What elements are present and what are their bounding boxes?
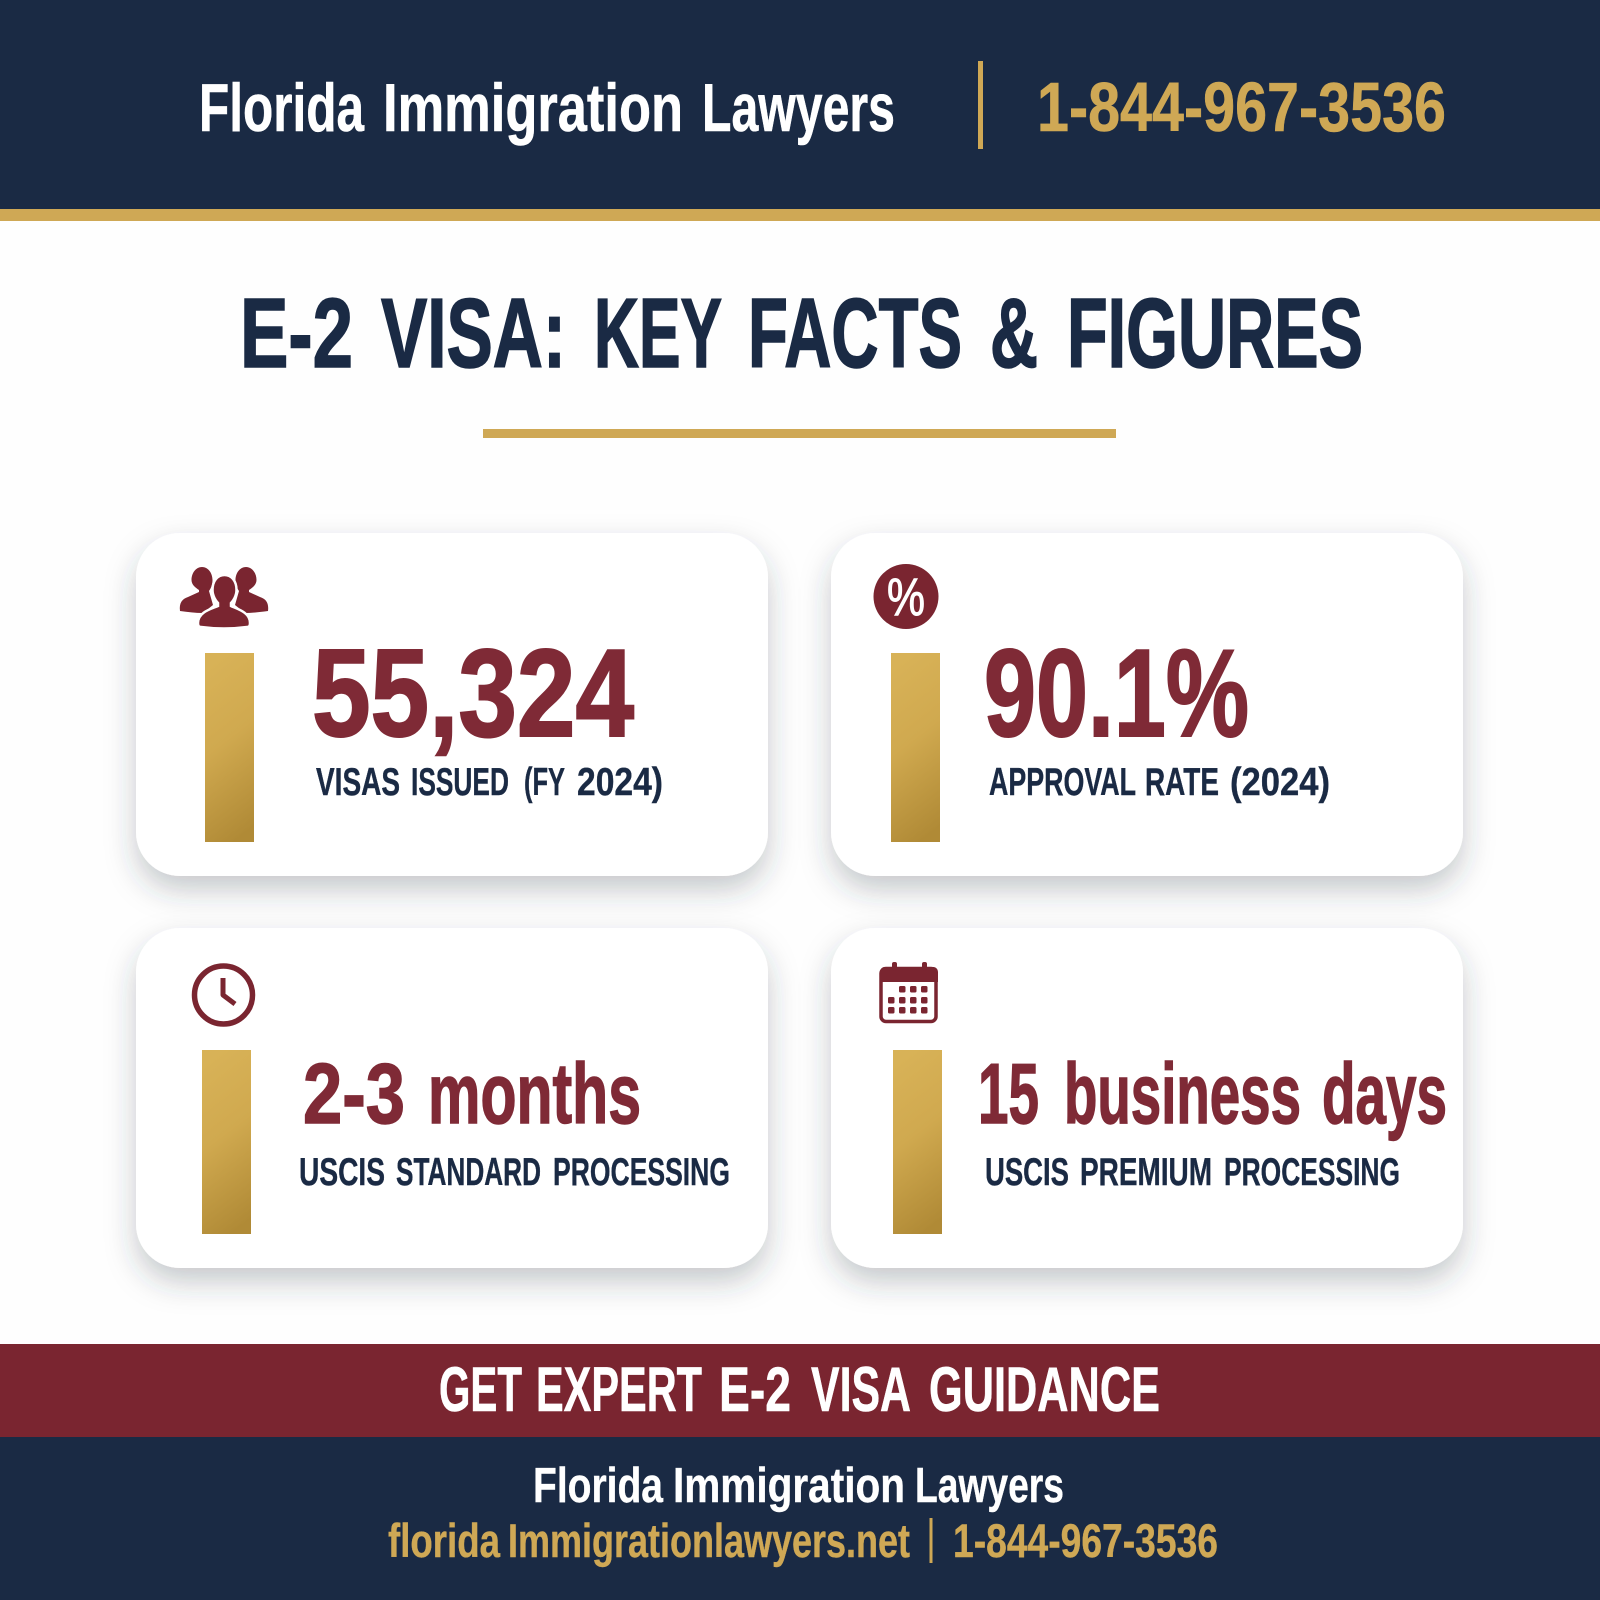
caption	[299, 1151, 730, 1194]
icon: clock	[194, 966, 252, 1024]
title: FIGURES	[1067, 278, 1363, 388]
caption: APPROVAL	[989, 761, 1136, 804]
caption: VISAS	[316, 761, 400, 804]
title underline	[483, 429, 1116, 438]
caption	[985, 1151, 1400, 1194]
statistic: months	[428, 1047, 641, 1142]
footer website: Immigrationlawyers.net	[508, 1514, 910, 1567]
title: VISA:	[381, 278, 566, 388]
caption	[316, 761, 663, 804]
header firm name: Florida	[199, 70, 365, 146]
statistic: days	[1322, 1047, 1447, 1142]
caption: 2024)	[577, 761, 663, 804]
footer firm name: Immigration	[673, 1459, 905, 1513]
panel: approval rate	[831, 533, 1463, 876]
header firm name	[199, 70, 895, 146]
footer website: florida	[388, 1514, 501, 1567]
header firm name: Immigration	[383, 70, 683, 146]
gold bar	[891, 653, 940, 842]
title: E-2	[240, 278, 353, 388]
call-to-action text: GET	[439, 1355, 522, 1425]
caption: PROCESSING	[1224, 1151, 1400, 1194]
icon: percent badge: %	[887, 568, 925, 627]
statistic: business	[1064, 1047, 1301, 1142]
icon: people	[180, 567, 268, 628]
footer firm name: Florida	[533, 1459, 664, 1513]
caption: STANDARD	[396, 1151, 541, 1194]
icon: calendar	[880, 962, 938, 1022]
caption: USCIS	[299, 1151, 385, 1194]
gold bar	[202, 1050, 251, 1234]
statistic: 15	[978, 1047, 1039, 1142]
panel: premium processing	[831, 928, 1463, 1268]
caption: (FY	[524, 761, 565, 804]
footer firm name	[533, 1459, 1064, 1513]
header divider	[978, 61, 983, 149]
gold bar	[205, 653, 254, 842]
statistic: 2-3	[303, 1047, 405, 1142]
footer divider	[930, 1518, 932, 1563]
caption: ISSUED	[411, 761, 509, 804]
title: KEY	[594, 278, 722, 388]
call-to-action text: GUIDANCE	[929, 1355, 1160, 1425]
caption	[989, 761, 1330, 804]
footer firm name: Lawyers	[915, 1459, 1064, 1513]
caption: PREMIUM	[1080, 1151, 1212, 1194]
caption: RATE	[1145, 761, 1219, 804]
panel: standard processing	[136, 928, 768, 1268]
statistic: 90.1%	[984, 625, 1249, 763]
title: FACTS	[748, 278, 962, 388]
call-to-action text	[439, 1355, 1160, 1425]
title	[240, 278, 1363, 388]
gold bar	[893, 1050, 942, 1234]
call-to-action text: EXPERT	[536, 1355, 702, 1425]
call-to-action text: VISA	[811, 1355, 911, 1425]
header band	[0, 0, 1600, 221]
header phone number: 1-844-967-3536	[1037, 68, 1446, 146]
header firm name: Lawyers	[702, 70, 895, 146]
footer phone number: 1-844-967-3536	[953, 1514, 1218, 1567]
panel: visas issued	[136, 533, 768, 876]
icon: percent badge	[874, 564, 938, 629]
call-to-action band	[0, 1344, 1600, 1437]
title: &	[990, 278, 1038, 388]
statistic	[303, 1047, 641, 1142]
caption: USCIS	[985, 1151, 1069, 1194]
footer website	[388, 1514, 910, 1567]
caption: (2024)	[1230, 761, 1330, 804]
call-to-action text: E-2	[719, 1355, 791, 1425]
caption: PROCESSING	[553, 1151, 730, 1194]
statistic: 55,324	[312, 625, 634, 763]
footer band	[0, 1437, 1600, 1600]
